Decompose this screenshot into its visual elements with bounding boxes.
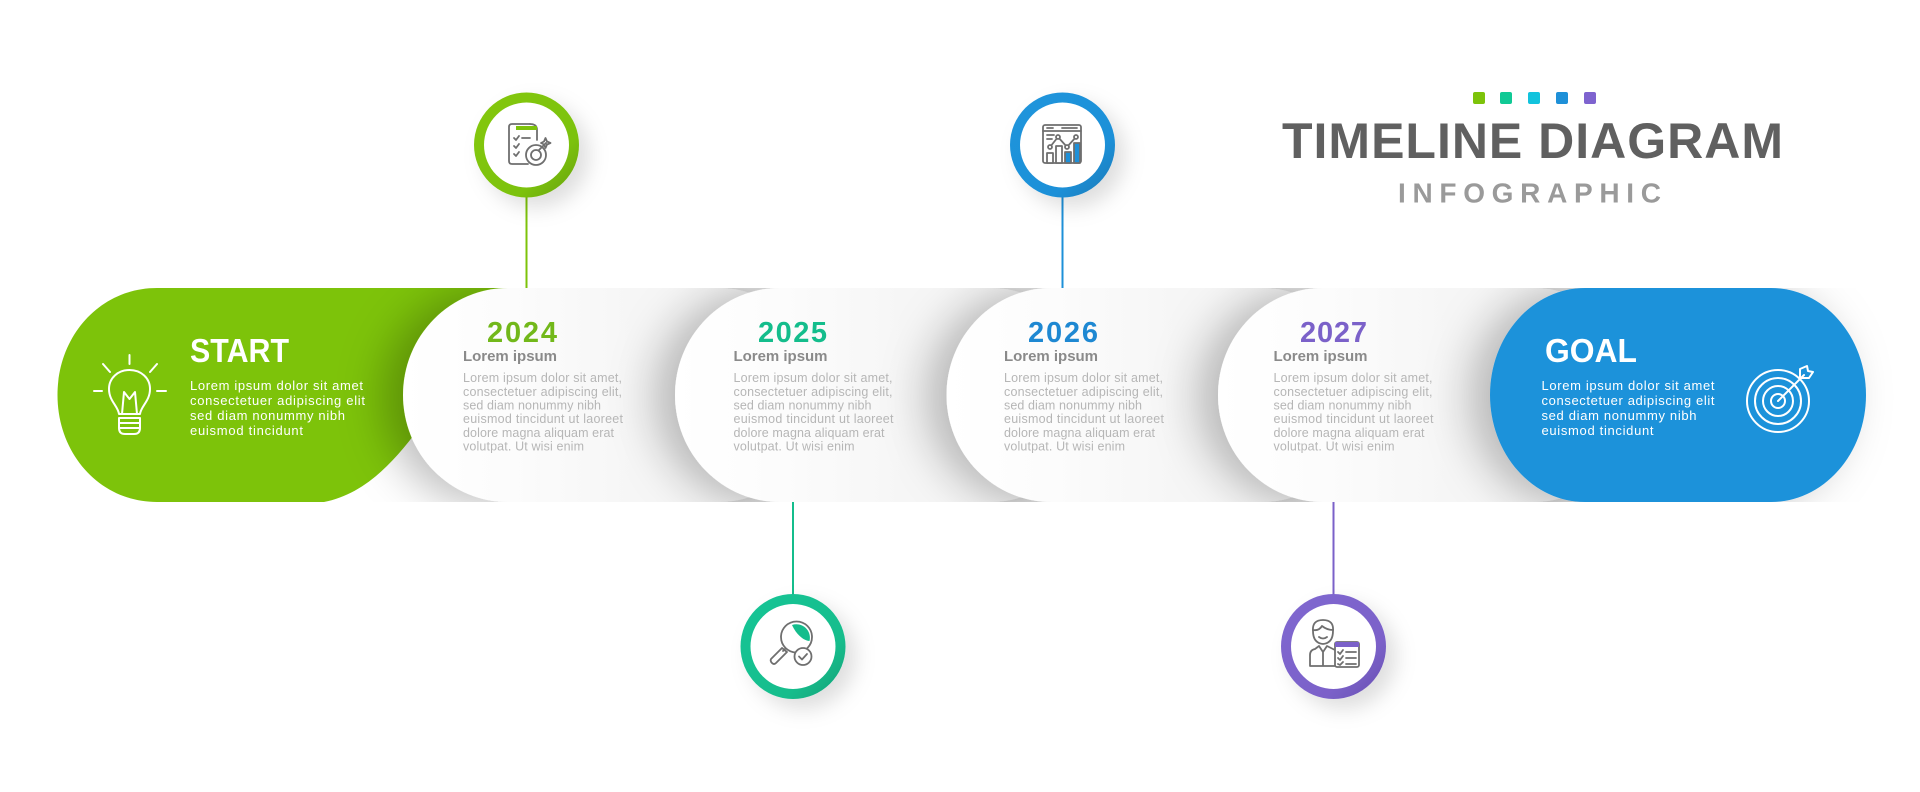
panel: 2024 text: consectetuer adipiscing elit, <box>463 385 622 399</box>
panel: 2026 text: euismod tincidunt ut laoreet <box>1004 412 1165 426</box>
panel: 2025 text <box>734 317 894 454</box>
panel: start background <box>58 288 525 502</box>
panel: 2025 text: Lorem ipsum <box>734 348 828 365</box>
panel: 2025 text: Lorem ipsum dolor sit amet, <box>734 371 892 385</box>
panel: 2027 text: dolore magna aliquam erat <box>1274 426 1425 440</box>
title block <box>1282 92 1783 208</box>
panel: 2026 text: volutpat. Ut wisi enim <box>1004 440 1125 454</box>
panel: goal text: euismod tincidunt <box>1542 423 1654 438</box>
panel: 2024 text: volutpat. Ut wisi enim <box>463 440 584 454</box>
connector: 2024 <box>526 190 528 292</box>
icon: light bulb <box>94 355 166 434</box>
panel: 2027 text <box>1274 317 1434 454</box>
timeline band <box>58 288 1866 502</box>
milestone badge: 2027 <box>1281 594 1386 699</box>
panel: 2026 text <box>1004 317 1165 454</box>
panel: 2027 text: consectetuer adipiscing elit, <box>1274 385 1432 399</box>
panel: 2027 background <box>1218 288 1638 502</box>
milestone badge: 2026 <box>1010 92 1115 198</box>
panel: 2025 text: dolore magna aliquam erat <box>734 426 885 440</box>
panel: 2025 text: volutpat. Ut wisi enim <box>734 440 854 454</box>
panel: 2027 text: 2027 <box>1300 317 1367 349</box>
panel: 2027 text: sed diam nonummy nibh <box>1274 398 1412 412</box>
heading: TIMELINE DIAGRAM <box>1282 113 1783 169</box>
panel: 2024 background <box>403 288 823 502</box>
colour key squares <box>1473 92 1596 104</box>
panel: 2027 text: Lorem ipsum <box>1274 348 1368 365</box>
panel: goal text: GOAL <box>1545 332 1637 369</box>
icon: target with arrow <box>1747 366 1813 432</box>
panel: 2025 text: 2025 <box>758 317 827 349</box>
panel: 2024 text: dolore magna aliquam erat <box>463 426 615 440</box>
panel: 2024 text <box>463 317 624 454</box>
panel: start text: Lorem ipsum dolor sit amet <box>190 378 363 393</box>
panel: 2025 text: sed diam nonummy nibh <box>734 398 872 412</box>
panel: 2027 text: volutpat. Ut wisi enim <box>1274 440 1394 454</box>
icon: person with checklist <box>1310 620 1359 667</box>
connector: 2025 <box>792 498 794 600</box>
panel: goal text: Lorem ipsum dolor sit amet <box>1542 378 1715 393</box>
panel: 2026 background <box>946 288 1366 502</box>
connector: 2027 <box>1332 498 1334 600</box>
connector: 2026 <box>1062 190 1064 292</box>
panel: 2024 text: sed diam nonummy nibh <box>463 398 601 412</box>
timeline infographic canvas <box>58 92 1868 714</box>
panel: 2026 text: Lorem ipsum <box>1004 348 1098 365</box>
panel: 2026 text: 2026 <box>1028 317 1098 349</box>
panel: goal background <box>1490 288 1866 502</box>
panel: start text <box>190 332 365 438</box>
panel: 2025 text: euismod tincidunt ut laoreet <box>734 412 894 426</box>
icon: analytics window <box>1043 125 1081 163</box>
panel: 2024 text: 2024 <box>487 317 557 349</box>
panel: 2027 text: Lorem ipsum dolor sit amet, <box>1274 371 1432 385</box>
milestone badge: 2025 <box>740 594 846 699</box>
panel: goal text: consectetuer adipiscing elit <box>1542 393 1715 408</box>
panel: start text: euismod tincidunt <box>190 423 303 438</box>
panel: 2024 text: Lorem ipsum <box>463 348 557 365</box>
subheading: INFOGRAPHIC <box>1398 178 1661 208</box>
panel: 2024 text: Lorem ipsum dolor sit amet, <box>463 371 622 385</box>
panel: 2025 background <box>675 288 1095 502</box>
panel: 2024 text: euismod tincidunt ut laoreet <box>463 412 624 426</box>
icon: magnifier with check <box>771 622 812 665</box>
panel: start text: consectetuer adipiscing elit <box>190 393 365 408</box>
panel: start text: sed diam nonummy nibh <box>190 408 345 423</box>
panel: 2026 text: Lorem ipsum dolor sit amet, <box>1004 371 1163 385</box>
panel: start text: START <box>190 332 289 369</box>
panel: 2025 text: consectetuer adipiscing elit, <box>734 385 892 399</box>
panel: 2026 text: dolore magna aliquam erat <box>1004 426 1156 440</box>
panel: 2026 text: sed diam nonummy nibh <box>1004 398 1142 412</box>
milestone badge: 2024 <box>474 92 579 198</box>
panel: goal text: sed diam nonummy nibh <box>1542 408 1696 423</box>
panel: 2026 text: consectetuer adipiscing elit, <box>1004 385 1163 399</box>
panel: goal text <box>1542 332 1715 438</box>
panel: 2027 text: euismod tincidunt ut laoreet <box>1274 412 1434 426</box>
icon: checklist with target <box>509 124 550 165</box>
